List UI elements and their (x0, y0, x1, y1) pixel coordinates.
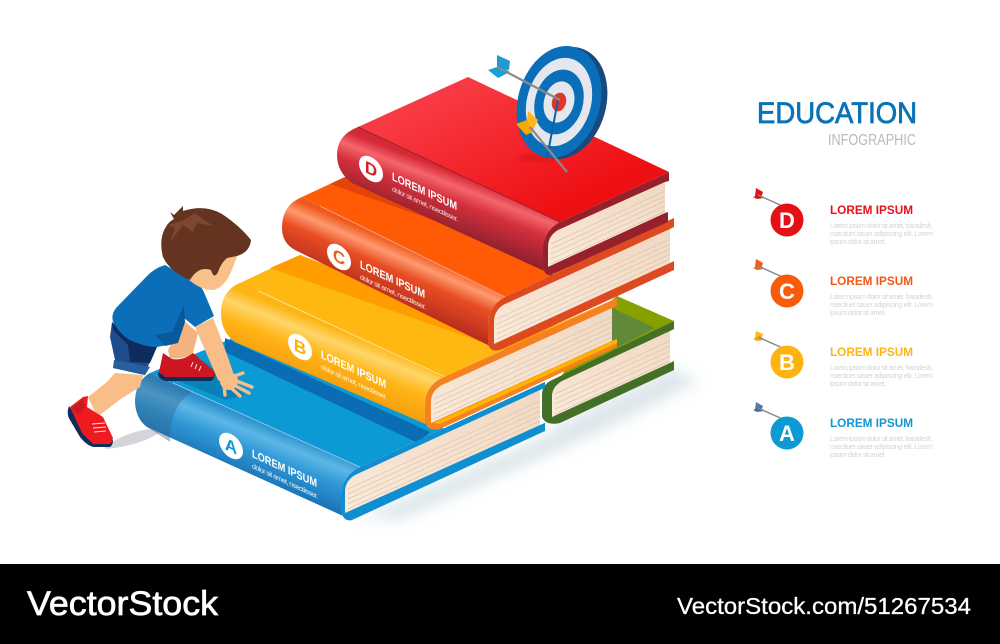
front shoe (158, 353, 215, 381)
book B pages (431, 307, 612, 423)
heading D: LOREM IPSUM (830, 205, 913, 217)
green book pages (552, 330, 670, 417)
book B cover edge (425, 298, 617, 430)
icon: arrow D (753, 188, 787, 208)
book A blue (135, 337, 545, 520)
subtitle: INFOGRAPHIC (828, 132, 916, 149)
book B top (242, 255, 617, 378)
book A pages (345, 390, 540, 513)
body text A: ipsum dolor sit amet. (830, 452, 886, 459)
arm and hand (195, 318, 252, 396)
book A sublabel: dolor sit amet, nsectiisser. (252, 461, 318, 501)
front leg (168, 320, 198, 358)
book D badge: D (365, 157, 377, 182)
title: EDUCATION (757, 97, 917, 130)
heading B: LOREM IPSUM (830, 347, 913, 359)
body text A: nsectiuet sauer adipiscing elit. Lorem (830, 444, 933, 451)
badge D: D (779, 208, 795, 233)
book B label: LOREM IPSUM (321, 348, 386, 391)
book C spine (282, 197, 505, 350)
book A badge (219, 428, 243, 464)
icon: arrow A (753, 402, 787, 421)
shorts (110, 322, 157, 375)
book D sublabel: dolor sit amet, nsectiisser. (392, 184, 458, 224)
legend item A (753, 402, 933, 459)
target with arrows (488, 36, 620, 172)
blue arrow (488, 55, 560, 100)
green book cover (542, 321, 674, 424)
back shoe (68, 396, 113, 447)
book D top (358, 77, 669, 222)
footer logo: VectorStock (27, 585, 219, 623)
book B badge: B (294, 335, 306, 360)
legend item C (753, 259, 933, 317)
book D pages (548, 182, 665, 267)
icon: arrow B (753, 331, 787, 350)
badge A: A (779, 421, 795, 446)
footer bar (0, 564, 1000, 644)
badge B: B (779, 350, 795, 375)
book A cover edge (341, 382, 545, 520)
green book (542, 296, 674, 424)
book C top (302, 170, 674, 297)
book A label: LOREM IPSUM (252, 447, 317, 490)
body text C: ipsum dolor sit amet. (830, 310, 886, 317)
body text A: Lorem ipsum dolor sit amet, haradesh, (830, 436, 933, 443)
body text C (830, 294, 933, 317)
badge A (770, 416, 804, 450)
target stand (547, 100, 558, 158)
book A badge: A (225, 434, 237, 459)
icon: arrow C (753, 259, 787, 279)
book D red (337, 77, 669, 275)
book D spine (337, 127, 560, 275)
hair (161, 206, 251, 280)
back leg (88, 373, 143, 415)
book C pages (494, 229, 670, 344)
face (188, 250, 238, 290)
target rings (504, 36, 614, 168)
footer url: VectorStock.com/51267534 (677, 593, 971, 619)
body text C: Lorem ipsum dolor sit amet, haradesh, (830, 294, 933, 301)
body text D: nsectiuet sauer adipiscing elit. Lorem (830, 231, 933, 238)
book C orange (282, 170, 674, 351)
body text B (830, 365, 933, 388)
body text D (830, 223, 933, 246)
book D badge (359, 151, 383, 187)
book B spine (221, 282, 442, 429)
body text B: nsectiuet sauer adipiscing elit. Lorem (830, 373, 933, 380)
book C badge: C (333, 245, 345, 270)
badge C (770, 274, 804, 308)
legend item B (753, 331, 933, 388)
badge B (770, 346, 804, 378)
body text B: Lorem ipsum dolor sit amet, haradesh, (830, 365, 933, 372)
target rim (510, 37, 620, 169)
badge C: C (779, 279, 795, 304)
boy figure (68, 206, 252, 447)
target shadow (517, 156, 553, 160)
body text B: ipsum dolor sit amet. (830, 381, 886, 388)
heading A: LOREM IPSUM (830, 418, 913, 430)
book C badge (327, 239, 351, 275)
book B yellow (221, 255, 617, 430)
book D cover edge (543, 172, 669, 274)
book A spine (135, 373, 360, 520)
body text D: Lorem ipsum dolor sit amet, haradesh, (830, 223, 933, 230)
body text A (830, 436, 933, 459)
book D label: LOREM IPSUM (392, 170, 457, 213)
book C cover edge (488, 218, 674, 351)
shirt (112, 265, 214, 347)
badge D (770, 204, 804, 236)
book C label: LOREM IPSUM (360, 258, 425, 301)
book stack shadow (360, 368, 698, 520)
green book top (560, 296, 674, 378)
body text C: nsectiuet sauer adipiscing elit. Lorem (830, 302, 933, 309)
legend item D (753, 188, 933, 246)
heading C: LOREM IPSUM (830, 276, 913, 288)
boy ground shadow (105, 427, 170, 449)
book C sublabel: dolor sit amet, nsectiisser. (360, 272, 426, 312)
book A top (150, 337, 545, 467)
body text D: ipsum dolor sit amet. (830, 239, 886, 246)
book B badge (288, 329, 312, 365)
book B sublabel: dolor sit amet, nsectiisser. (321, 362, 387, 402)
yellow arrow (516, 111, 567, 172)
